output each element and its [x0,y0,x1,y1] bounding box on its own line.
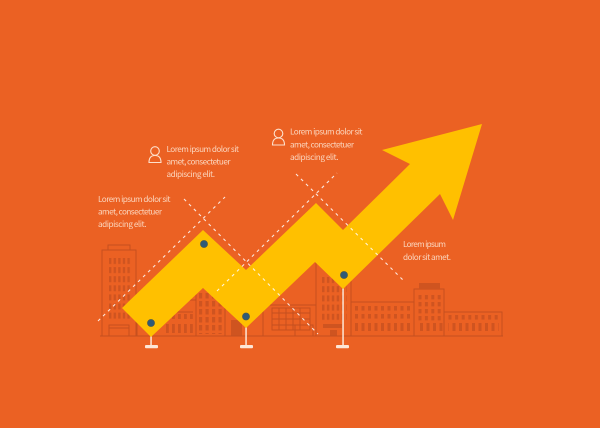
text: left block: adipiscing elit. [98,218,146,230]
text: upper block: Lorem ipsum dolor sit [290,126,362,138]
dashed guide lines [98,173,405,334]
pin 2 [240,325,253,348]
text: upper block: adipiscing elit. [290,151,338,163]
text: middle block [166,143,239,180]
pins [145,286,349,348]
building: tower with peak [316,262,351,336]
icon: person right [272,129,284,145]
text: middle block: amet, consectetuer [166,156,231,168]
building: glass front [263,305,316,336]
icon: person left [149,147,161,162]
text: left block: amet, consectetuer [98,206,163,218]
text: upper block [290,126,362,163]
marker 1 [148,320,154,326]
text: middle block: Lorem ipsum dolor sit [166,143,239,155]
building: long block [351,302,414,336]
building: low block [137,300,196,336]
text: middle block: adipiscing elit. [166,168,215,180]
text: left block: Lorem ipsum dolor sit [98,193,170,205]
text: right block [403,238,451,263]
building: centre block [196,288,225,336]
text: right block: Lorem ipsum [403,238,446,250]
text: upper block: amet, consectetuer [290,138,355,150]
pin 1 [145,335,158,348]
building: right block [444,312,502,336]
text: right block: dolor sit amet. [403,251,451,263]
marker 2 [200,240,208,248]
building: roof tower [414,283,444,336]
marker 4 [340,272,348,278]
building: tall left tower [102,245,136,336]
text: left block [98,193,170,230]
pin 3 [336,286,349,348]
marker 3 [242,313,250,320]
markers [148,240,348,326]
building: door block [225,300,263,336]
growth arrow [122,124,482,337]
city skyline [100,245,503,336]
